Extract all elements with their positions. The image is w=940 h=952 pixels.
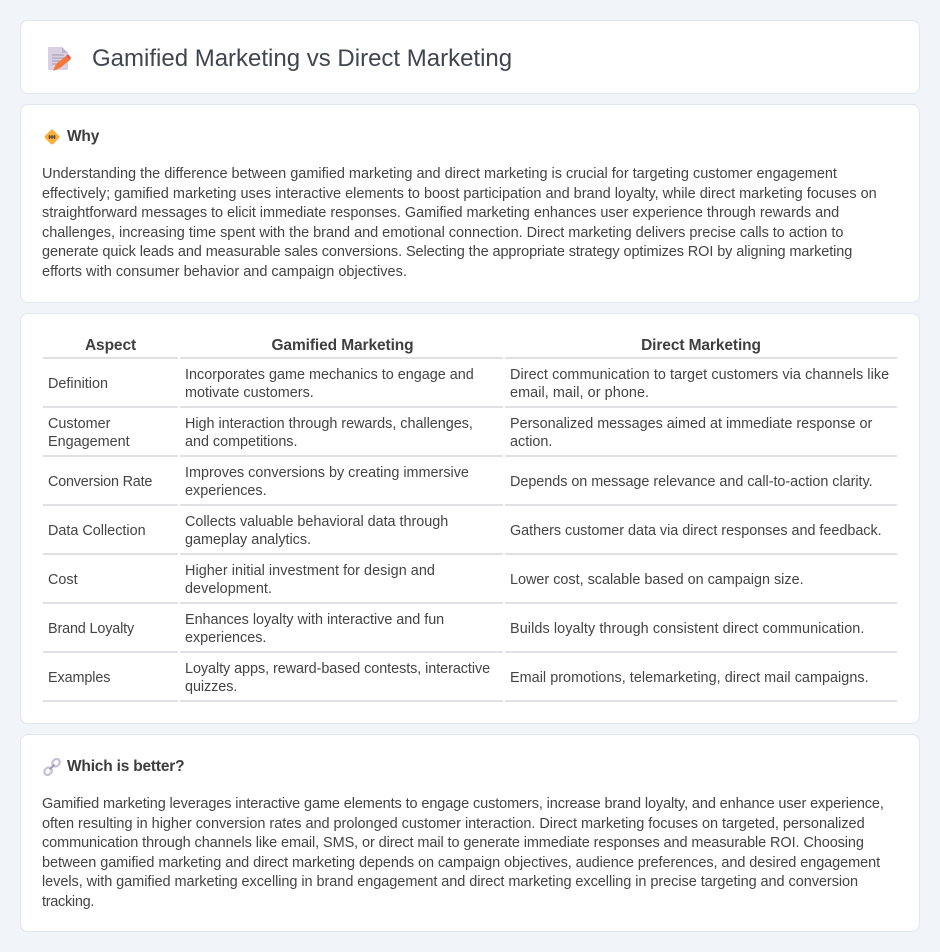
table header: aspect: Aspect bbox=[85, 337, 136, 354]
cell: direct loyalty: Builds loyalty through consistent direct communication. bbox=[510, 621, 864, 637]
row label: customer engagement: Engagement bbox=[48, 434, 130, 450]
cell: direct engagement: Personalized messages aimed at immediate response or bbox=[510, 416, 872, 432]
text block: which is better: communication through channels like email, SMS, or direct mail to generate immediate responses and measurable ROI. Choosing bbox=[42, 835, 864, 851]
cell: direct definition bbox=[510, 367, 889, 401]
text block: why: challenges, increasing time spent with the brand and emotional connection. Direct marketing delivers precise calls to action to bbox=[42, 225, 843, 241]
cell: gamified engagement: High interaction through rewards, challenges, bbox=[185, 416, 473, 432]
cell: gamified loyalty bbox=[185, 612, 444, 646]
row label: cost: Cost bbox=[48, 572, 78, 588]
text block: which is better bbox=[42, 796, 884, 910]
cell: direct engagement bbox=[510, 416, 872, 450]
cell: direct engagement: action. bbox=[510, 434, 552, 450]
text block: why: generate quick leads and measurable sales conversions. Selecting the appropriate strategy optimizes ROI by aligning marketing bbox=[42, 244, 852, 260]
title: Gamified Marketing vs Direct Marketing bbox=[92, 45, 512, 72]
panel: which is better bbox=[20, 734, 920, 932]
cell: direct cost: Lower cost, scalable based on campaign size. bbox=[510, 572, 804, 588]
cell: gamified data: Collects valuable behavioral data through bbox=[185, 514, 448, 530]
cell: gamified cost bbox=[185, 563, 435, 597]
table header: gamified marketing: Gamified Marketing bbox=[271, 337, 414, 354]
text block: why: efforts with consumer behavior and campaign objectives. bbox=[42, 264, 407, 280]
panel: header bbox=[20, 20, 920, 94]
row label: examples: Examples bbox=[48, 670, 110, 686]
heading: which is better: Which is better? bbox=[67, 758, 184, 775]
text block: why: Understanding the difference between gamified marketing and direct marketing is crucial for targeting customer engagement bbox=[42, 166, 837, 182]
heading: why: Why bbox=[67, 128, 99, 145]
cell: gamified examples bbox=[185, 661, 490, 695]
row label: data collection: Data Collection bbox=[48, 523, 146, 539]
cell: direct definition: Direct communication to target customers via channels like bbox=[510, 367, 889, 383]
cell: direct data: Gathers customer data via direct responses and feedback. bbox=[510, 523, 882, 539]
panel: why bbox=[20, 104, 920, 303]
cell: gamified cost: development. bbox=[185, 581, 272, 597]
text block: which is better: levels, with gamified marketing excelling in brand engagement and direct marketing excelling in precise targeting and conversion bbox=[42, 874, 858, 890]
icon: warning diamond bbox=[44, 130, 60, 144]
panel: comparison table bbox=[20, 313, 920, 724]
text block: why bbox=[42, 166, 877, 280]
row label: definition: Definition bbox=[48, 376, 108, 392]
text block: which is better: between gamified marketing and direct marketing depends on campaign objectives, audience preferences, and desired engagement bbox=[42, 855, 880, 871]
text block: why: effectively; gamified marketing uses interactive elements to boost participation and brand loyalty, while direct marketing focuses on bbox=[42, 186, 877, 202]
cell: gamified definition: Incorporates game mechanics to engage and bbox=[185, 367, 474, 383]
cell: gamified data: gameplay analytics. bbox=[185, 532, 311, 548]
cell: gamified definition bbox=[185, 367, 474, 401]
cell: gamified conversion bbox=[185, 465, 469, 499]
cell: gamified data bbox=[185, 514, 448, 548]
cell: gamified cost: Higher initial investment for design and bbox=[185, 563, 435, 579]
text block: which is better: often resulting in higher conversion rates and prolonged customer interaction. Direct marketing focuses on targeted, personalized bbox=[42, 816, 865, 832]
cell: gamified engagement bbox=[185, 416, 473, 450]
cell: gamified examples: quizzes. bbox=[185, 679, 237, 695]
row label: brand loyalty: Brand Loyalty bbox=[48, 621, 134, 637]
text block: why: straightforward messages to elicit immediate responses. Gamified marketing enhances user experience through rewards and bbox=[42, 205, 839, 221]
row label: customer engagement bbox=[48, 416, 130, 450]
text block: which is better: Gamified marketing leverages interactive game elements to engage customers, increase brand loyalty, and enhance user experience, bbox=[42, 796, 884, 812]
icon: document with pencil bbox=[48, 47, 71, 71]
cell: gamified definition: motivate customers. bbox=[185, 385, 314, 401]
table header: direct marketing: Direct Marketing bbox=[641, 337, 761, 354]
cell: gamified conversion: experiences. bbox=[185, 483, 267, 499]
cell: gamified conversion: Improves conversions by creating immersive bbox=[185, 465, 469, 481]
cell: gamified loyalty: experiences. bbox=[185, 630, 266, 646]
cell: direct conversion: Depends on message relevance and call-to-action clarity. bbox=[510, 474, 873, 490]
cell: gamified examples: Loyalty apps, reward-based contests, interactive bbox=[185, 661, 490, 677]
cell: direct examples: Email promotions, telemarketing, direct mail campaigns. bbox=[510, 670, 869, 686]
row label: conversion rate: Conversion Rate bbox=[48, 474, 152, 490]
cell: gamified engagement: and competitions. bbox=[185, 434, 297, 450]
cell: direct definition: email, mail, or phone. bbox=[510, 385, 649, 401]
cell: gamified loyalty: Enhances loyalty with interactive and fun bbox=[185, 612, 444, 628]
text block: which is better: tracking. bbox=[42, 894, 94, 910]
row label: customer engagement: Customer bbox=[48, 416, 110, 432]
icon: link bbox=[43, 758, 61, 776]
